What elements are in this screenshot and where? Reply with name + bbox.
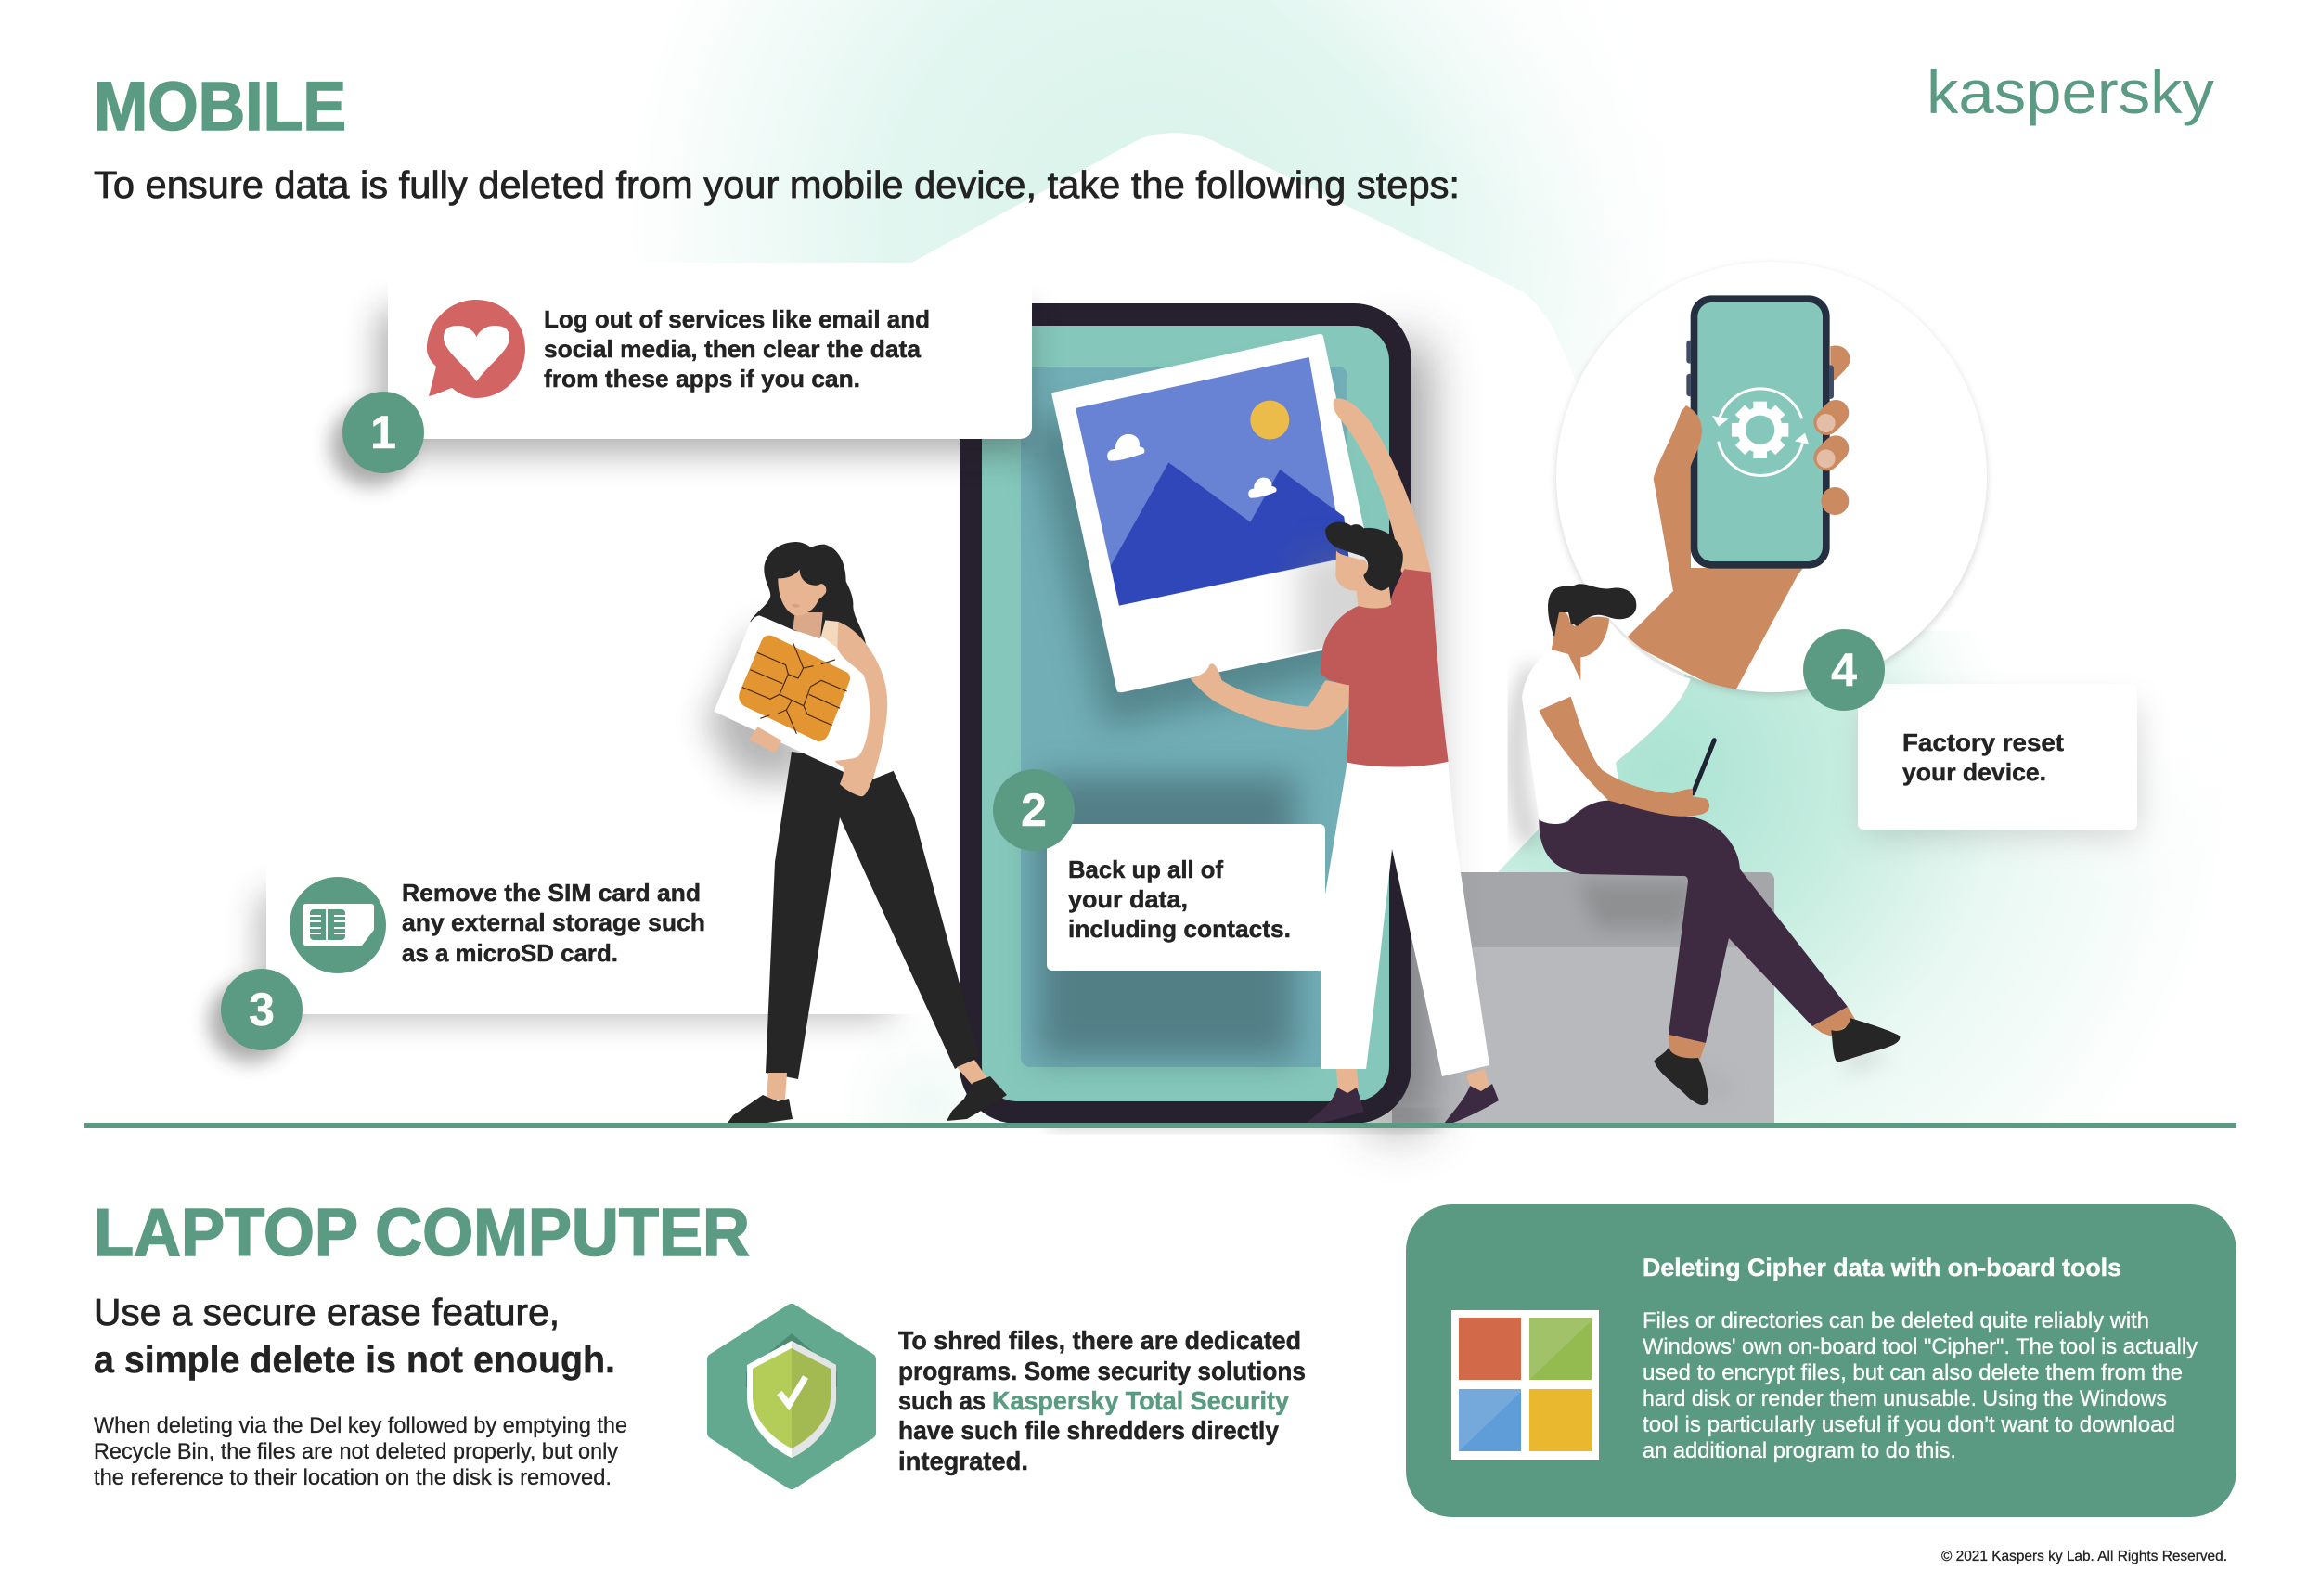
shoes [1303, 1084, 1499, 1126]
badge 3 [209, 969, 303, 1062]
icon: sim card [290, 877, 386, 973]
step text: as a microSD card. [402, 939, 618, 967]
card 2: back up [1047, 824, 1325, 971]
chip contacts [742, 642, 847, 734]
mountains [1111, 462, 1348, 606]
shoes [1831, 1018, 1900, 1062]
title: laptop computer: LAPTOP COMPUTER [94, 1196, 750, 1270]
heading: secure erase [94, 1291, 615, 1381]
panel body text: an additional program to do this. [1643, 1438, 1956, 1463]
panel body text: Files or directories can be deleted quite reliably with [1643, 1308, 2149, 1333]
step text [544, 305, 930, 393]
text block: shred files: integrated. [898, 1447, 1028, 1475]
logo: kaspersky: kaspersky [1927, 58, 2214, 126]
step text: from these apps if you can. [544, 365, 860, 393]
ankles [1336, 1069, 1490, 1093]
photo print [1051, 334, 1386, 692]
step text: any external storage such [402, 908, 705, 936]
card 4: factory reset [1858, 684, 2137, 835]
step text: including contacts. [1068, 915, 1291, 943]
badge 3: 3 [249, 984, 275, 1036]
mouth [792, 604, 800, 608]
red shirt [1321, 569, 1449, 766]
step text: your device. [1902, 758, 2046, 786]
phone shadow [1049, 343, 1438, 1128]
background: mint glow behind house shape [388, 0, 1819, 650]
step text: Back up all of [1068, 856, 1223, 883]
thumb overlap [1654, 405, 1702, 575]
ground line [84, 1123, 2236, 1128]
text block: delete explanation: the reference to their location on the disk is removed. [94, 1465, 612, 1490]
cloud [1107, 434, 1144, 461]
badge 2: 2 [1021, 784, 1047, 836]
hair [750, 542, 866, 645]
panel body text: used to encrypt files, but can also delete them from the [1643, 1360, 2183, 1385]
text block: delete explanation: Recycle Bin, the files are not deleted properly, but only [94, 1439, 618, 1464]
shadow of photo and backup card [1030, 371, 1364, 1059]
icon: windows logo [1451, 1310, 1599, 1460]
sun [1250, 401, 1289, 440]
badge 2 [993, 769, 1075, 851]
white trousers [1321, 759, 1489, 1076]
text block: shred files: such as [898, 1386, 986, 1415]
text block: delete explanation [94, 1413, 627, 1490]
sim card [714, 615, 903, 779]
text block: shred files: To shred files, there are dedicated [898, 1326, 1301, 1355]
step text: Log out of services like email and [544, 305, 930, 333]
fingers [1826, 413, 1836, 457]
black trousers [766, 752, 979, 1079]
neck [793, 612, 823, 638]
top [821, 620, 839, 648]
raised arm [1334, 398, 1432, 575]
step text [402, 879, 705, 967]
card 3: remove SIM [260, 840, 934, 1017]
head [1552, 611, 1609, 680]
person: man lifting the photo [1191, 398, 1499, 1126]
text block: shred files [898, 1326, 1306, 1475]
step text [1902, 728, 2064, 786]
small hand [750, 727, 780, 753]
arm [1539, 697, 1709, 817]
phone body [960, 303, 1411, 1124]
seated man figure [1522, 584, 1900, 1105]
face [778, 569, 826, 615]
badge 4: 4 [1831, 644, 1857, 696]
step text: Factory reset [1902, 728, 2064, 756]
white shirt [1522, 622, 1691, 824]
panel body text: tool is particularly useful if you don't want to download [1643, 1412, 2175, 1437]
tablet [1693, 740, 1714, 793]
picture sky [1076, 357, 1344, 606]
text block: shred files: have such file shredders directly [898, 1416, 1279, 1445]
step text [1068, 856, 1291, 943]
step text: social media, then clear the data [544, 335, 922, 363]
panel: cipher tool [1406, 1204, 2236, 1517]
ankles [767, 1060, 989, 1100]
screen inner panel [1021, 367, 1347, 1067]
hair [1548, 584, 1636, 637]
text block: shred files: Kaspersky Total Security [992, 1386, 1289, 1415]
hair [1325, 522, 1403, 591]
big phone with photo [960, 303, 1411, 1124]
text block: delete explanation: When deleting via the Del key followed by emptying the [94, 1413, 627, 1438]
hand [1624, 405, 1803, 696]
panel body text: hard disk or render them unusable. Using the Windows [1643, 1386, 2167, 1411]
icon: heart speech bubble [427, 300, 525, 398]
panel heading: Deleting Cipher data with on-board tools [1643, 1254, 2121, 1281]
title: mobile: MOBILE [94, 68, 346, 145]
phone screen [982, 326, 1389, 1101]
neck and face [1335, 550, 1391, 609]
background: mint floor glow right of phone [835, 260, 2320, 1123]
top finger [1830, 345, 1850, 380]
card 1: log out [379, 263, 1032, 453]
heading: secure erase: a simple delete is not enough. [94, 1338, 615, 1381]
shoes [728, 1076, 1007, 1126]
subtitle: mobile: To ensure data is fully deleted from your mobile device, take the following steps: [94, 163, 1460, 206]
footer copyright: © 2021 Kaspers ky Lab. All Rights Reserved. [1941, 1549, 2227, 1564]
icon: shield in hexagon [714, 1310, 870, 1483]
heading: secure erase: Use a secure erase feature, [94, 1291, 560, 1333]
badge 1 [330, 392, 424, 486]
badge 4 [1803, 629, 1885, 711]
small phone [1691, 295, 1830, 569]
badge 1: 1 [370, 406, 396, 458]
chip [741, 638, 847, 739]
person shadow: seated man [1516, 668, 1893, 1104]
panel body text [1643, 1308, 2198, 1463]
text block: shred files: programs. Some security solutions [898, 1357, 1306, 1385]
step text: your data, [1068, 885, 1188, 913]
side buttons [1686, 341, 1834, 399]
ankles [1669, 1007, 1856, 1064]
trousers [1539, 801, 1848, 1043]
person: woman holding SIM card [705, 542, 1007, 1126]
step text: Remove the SIM card and [402, 879, 701, 907]
bench [1392, 872, 1774, 1124]
lower arm [1191, 663, 1352, 730]
cloud [1248, 478, 1277, 498]
circle with hand and phone [1556, 262, 1987, 696]
panel body text: Windows' own on-board tool "Cipher". The tool is actually [1643, 1334, 2198, 1359]
icon: gear with arrows [1712, 389, 1809, 475]
arm and hand [835, 622, 887, 796]
